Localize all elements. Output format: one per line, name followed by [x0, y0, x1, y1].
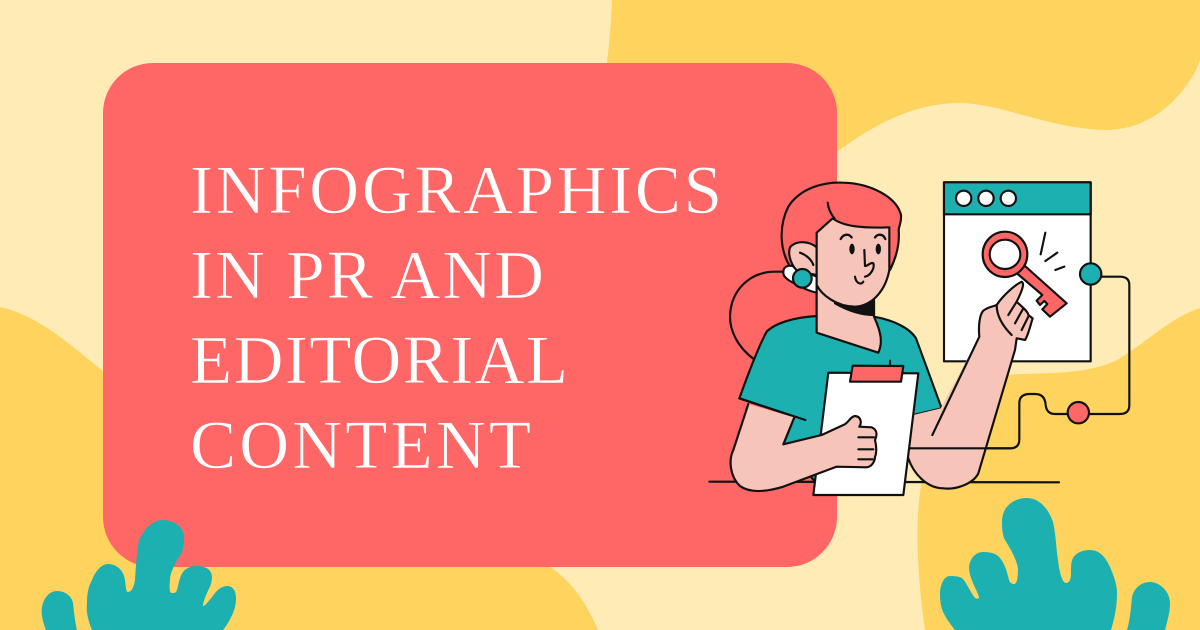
connector node: teal: [1080, 263, 1101, 285]
title: CONTENT: [190, 407, 531, 483]
clipboard clip: [850, 366, 903, 382]
nose: [864, 250, 874, 277]
earring: [793, 269, 812, 288]
finger lines: [858, 437, 874, 459]
ponytail: [730, 272, 817, 360]
key sparkle lines: [1041, 233, 1064, 270]
arm outline: [908, 282, 1033, 489]
neck shadow: [835, 302, 874, 315]
right arm raised and pointing: [908, 282, 1033, 489]
arm outline: [731, 404, 876, 491]
connector wire: [910, 277, 1129, 448]
browser window: [944, 182, 1091, 361]
window button 1: [956, 191, 971, 206]
title: INFOGRAPHICS: [190, 152, 722, 228]
neck: [817, 283, 881, 353]
title: IN PR AND: [190, 237, 544, 313]
wire over arm: [910, 445, 1010, 452]
ear: [789, 242, 817, 275]
window button 2: [978, 191, 994, 206]
face: [817, 218, 889, 307]
earring backing: [783, 266, 817, 293]
sleeve edge: [739, 398, 805, 420]
eyes: [849, 244, 881, 254]
panel: red title card: [103, 63, 837, 567]
plant: left: [42, 520, 236, 630]
title: [190, 152, 722, 483]
smile: [855, 277, 863, 283]
window button 3: [1001, 191, 1016, 206]
icon: key: [983, 232, 1067, 317]
connector node: red: [1068, 402, 1089, 423]
plant: right small leaf: [1127, 582, 1170, 630]
title bar: [944, 182, 1091, 214]
finger lines: [997, 302, 1028, 335]
plant: right: [940, 498, 1117, 630]
illustration: woman with browser window and key: [709, 182, 1129, 495]
title: EDITORIAL: [190, 322, 568, 398]
ground line: [709, 478, 1059, 486]
eyebrows: [841, 235, 885, 239]
background blob: lower left yellow: [0, 307, 598, 630]
left arm and hand: [731, 404, 876, 491]
clipboard: [813, 361, 918, 495]
ear inner line: [800, 253, 813, 265]
background blob: lower right yellow: [918, 308, 1200, 630]
background blob: top right yellow: [607, 0, 1200, 152]
hair: [782, 183, 901, 275]
fringe line: [828, 203, 835, 219]
shirt: [739, 316, 942, 482]
